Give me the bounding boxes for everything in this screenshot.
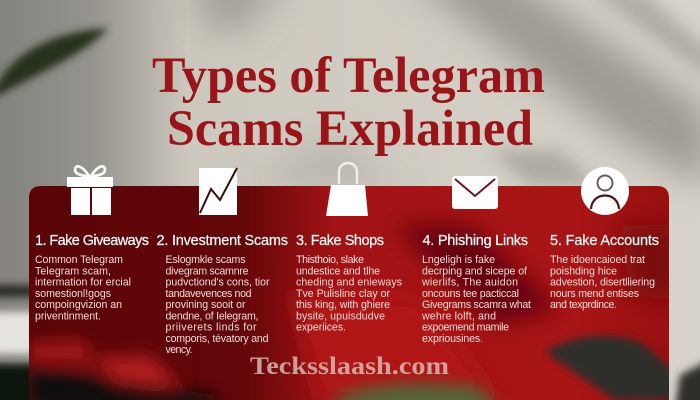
icon: user account — [581, 167, 629, 215]
icon: investment chart — [199, 168, 237, 215]
column 2: Investment Scams: comporis, tévatory and — [166, 333, 269, 345]
column 5: Fake Accounts — [550, 233, 659, 311]
column 1: Fake Giveaways: priventinment. — [35, 310, 101, 322]
column 1: Fake Giveaways: somestionl!gogs — [35, 288, 111, 300]
column 1: Fake Giveaways: Telegram scam, — [35, 266, 111, 278]
column 3: Fake Shops: 3. Fake Shops — [296, 233, 384, 249]
column 2: Investment Scams: tandavevences nod — [166, 288, 252, 300]
watermark: Tecksslaash.com — [250, 353, 449, 380]
column 5: Fake Accounts: and texprdince. — [550, 299, 617, 311]
column 1: Fake Giveaways — [35, 233, 149, 322]
panel: red card — [29, 186, 700, 400]
column 2: Investment Scams: provining sooit or — [166, 299, 246, 311]
column 2: Investment Scams — [156, 233, 288, 356]
column 1: Fake Giveaways: intermation for ercial — [35, 276, 131, 288]
icon: gift — [67, 166, 113, 215]
icon: envelope — [452, 176, 498, 209]
column 3: Fake Shops: experiices. — [296, 322, 346, 334]
column 2: Investment Scams: divegram scamnre — [166, 266, 249, 278]
column 2: Investment Scams: priiverets linds for — [166, 322, 257, 334]
column 2: Investment Scams: pudvctiond's cons, tior — [166, 276, 270, 288]
column 4: Phishing Links: Lngeligh is fake — [422, 254, 495, 266]
column 3: Fake Shops: undestice and tlhe — [296, 266, 380, 278]
column 2: Investment Scams: vency. — [166, 344, 192, 356]
column 3: Fake Shops: bysite, upuisdudve — [296, 310, 385, 322]
column 3: Fake Shops: Tve Pulisline clay or — [296, 288, 390, 300]
column 5: Fake Accounts: nours mend entises — [550, 288, 639, 300]
column 3: Fake Shops: cheding and enieways — [296, 276, 402, 288]
column 5: Fake Accounts: The idoencaioed trat — [550, 254, 645, 266]
column 1: Fake Giveaways: Common Telegram — [35, 254, 123, 266]
column 5: Fake Accounts: advestion, disertlliering — [550, 276, 655, 288]
column 2: Investment Scams: Eslogmkle scams — [166, 254, 246, 266]
title: Types of Telegram — [152, 48, 545, 104]
column 4: Phishing Links: wierlifs, The auidon — [421, 276, 518, 288]
column 2: Investment Scams: 2. Investment Scams — [156, 233, 288, 249]
column 5: Fake Accounts: poishding hice — [550, 266, 617, 278]
title — [152, 48, 545, 157]
column 1: Fake Giveaways: 1. Fake Giveaways — [35, 233, 149, 249]
column 4: Phishing Links — [421, 233, 531, 345]
column 3: Fake Shops: this king, with ghiere — [296, 299, 390, 311]
column 5: Fake Accounts: 5. Fake Accounts — [550, 233, 659, 249]
column 3: Fake Shops — [296, 233, 402, 334]
column 4: Phishing Links: Givegrams scamra what — [422, 299, 531, 311]
column 4: Phishing Links: expoemend mamile — [422, 322, 509, 334]
column 4: Phishing Links: decrping and sicepe of — [422, 266, 527, 278]
column 2: Investment Scams: dendne, of Ielegram, — [166, 310, 258, 322]
column 4: Phishing Links: 4. Phishing Links — [422, 233, 528, 249]
column 3: Fake Shops: Thisthoio, slake — [296, 254, 364, 266]
column 4: Phishing Links: expriousines. — [422, 333, 483, 345]
title: Scams Explained — [167, 101, 533, 157]
icon: shopping bag — [326, 163, 368, 216]
column 1: Fake Giveaways: compoingvizion an — [35, 299, 122, 311]
column 4: Phishing Links: wehre lolft, and — [421, 310, 496, 322]
column 4: Phishing Links: oncouns tee pacticcal — [422, 288, 519, 300]
